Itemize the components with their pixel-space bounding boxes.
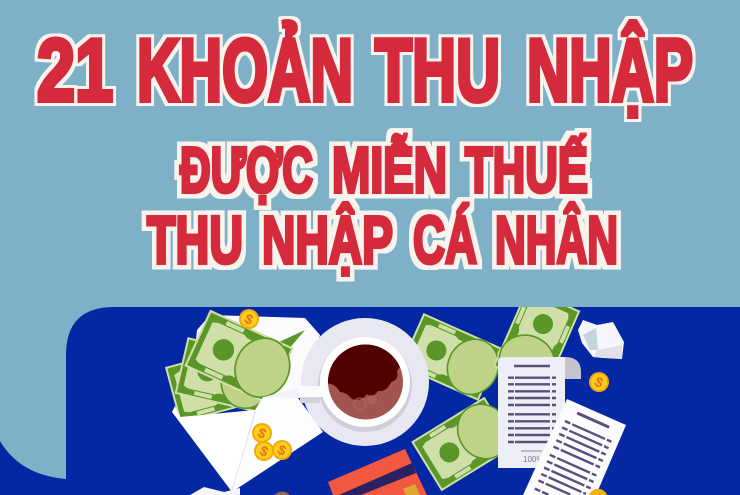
title line 2: MIỄN (332, 134, 447, 206)
receipt 1 (498, 357, 581, 468)
banknote peeking behind envelope (280, 330, 305, 347)
banknote: middle left (174, 337, 260, 412)
coin bottom right (589, 489, 607, 495)
credit card (328, 449, 427, 495)
coin stack 1 (252, 423, 272, 443)
coin top: $ (242, 310, 256, 328)
banknote: beside cup (412, 313, 501, 401)
title line 2 (180, 134, 588, 206)
title line 1: 21 (37, 20, 113, 120)
coin stack 3 (272, 440, 292, 460)
title line 2: ĐƯỢC (180, 134, 313, 206)
banknote: top left (184, 310, 294, 401)
coin stack 2: $ (257, 442, 271, 460)
title line 3: NHẬP (262, 203, 393, 278)
banknote: bottom right (411, 396, 498, 492)
crumpled paper (578, 320, 624, 359)
coin stack 3: $ (275, 441, 289, 459)
blue panel (66, 307, 740, 495)
coin top (239, 309, 259, 329)
title line 3: THU (147, 203, 243, 278)
title line 3 (147, 203, 618, 278)
title line 2: THUẾ (465, 134, 588, 206)
title line 1 (37, 20, 693, 120)
envelope front (172, 388, 323, 492)
envelope scrap at bottom (190, 487, 240, 495)
coffee cup (298, 318, 429, 446)
title line 3: NHÂN (495, 203, 618, 278)
bottom-left corner shape (0, 441, 66, 495)
banknote: lower left (165, 362, 237, 424)
title line 1: KHOẢN (137, 20, 353, 120)
illustration: money, coffee and receipts (165, 288, 626, 495)
receipt 2 (523, 399, 626, 495)
coin right (589, 372, 609, 392)
title line 3: CÁ (413, 203, 477, 278)
coin right: $ (592, 373, 606, 391)
envelope back (196, 315, 320, 398)
receipt 1: 100% (523, 455, 543, 464)
brown object at bottom (274, 492, 290, 495)
coin stack 1: $ (255, 424, 269, 442)
title line 1: THU (375, 20, 500, 120)
coin stack 2 (254, 441, 274, 461)
banknote: top right, behind receipt (493, 307, 580, 369)
